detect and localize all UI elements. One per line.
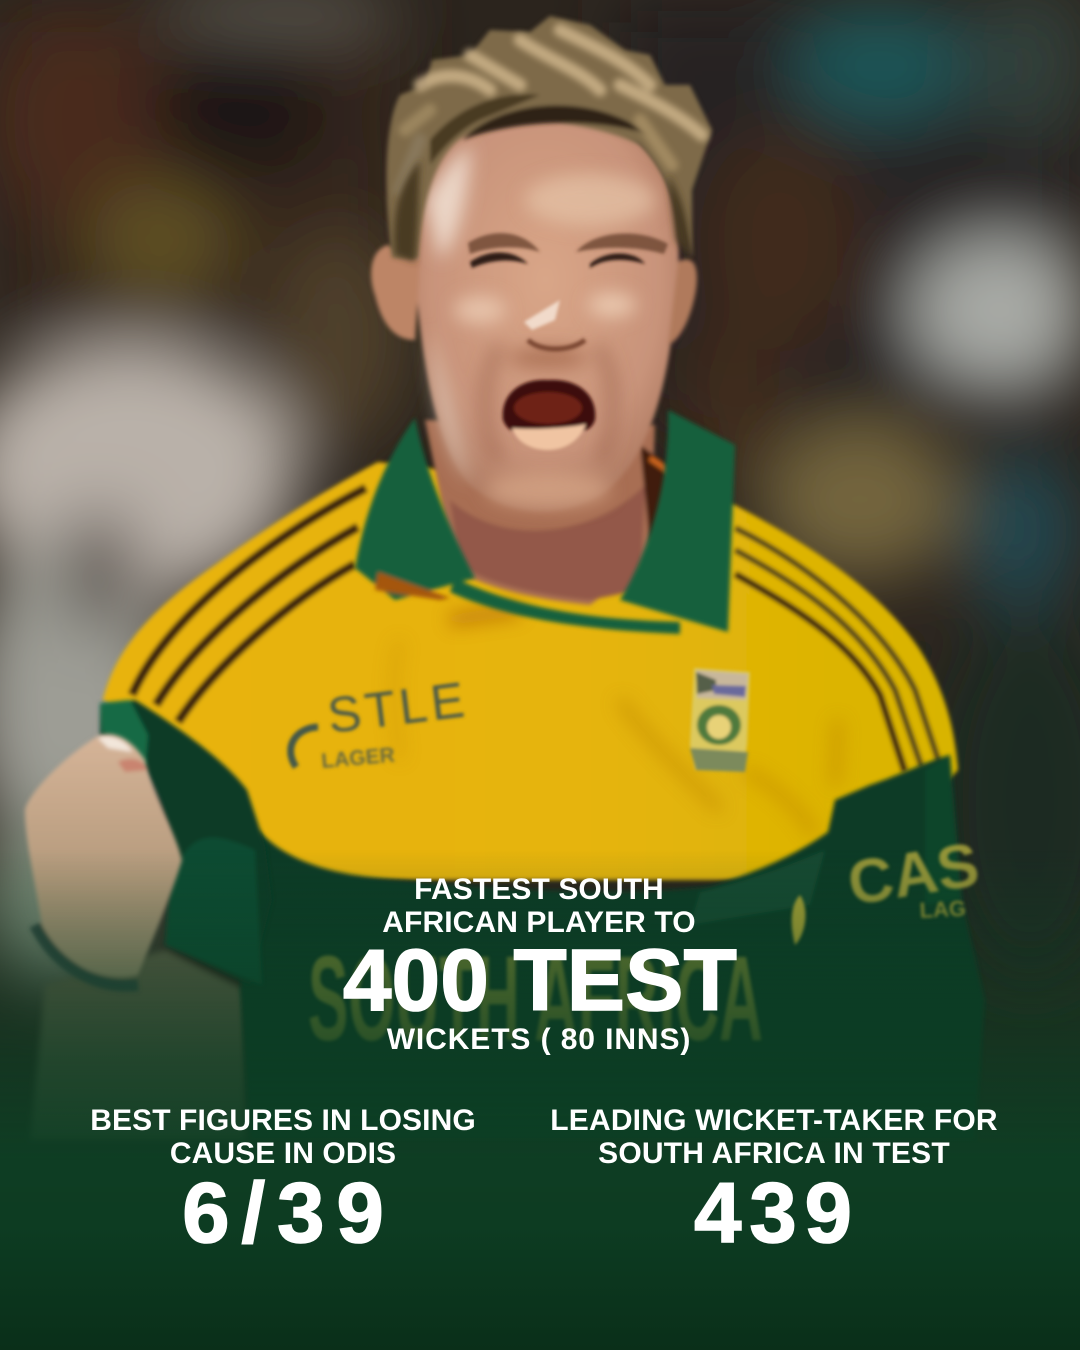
jersey body [103,462,958,880]
headline number: 400 TEST [343,932,737,1029]
stat label: BEST FIGURES IN LOSING [90,1104,476,1137]
badge and sponsor logo: LAGER [320,744,396,773]
left sleeve pulled by the fist [100,700,272,985]
headline label: FASTEST SOUTH [414,873,664,906]
collar [355,410,735,634]
badge and sponsor logo: STLE [325,671,471,744]
badge and sponsor logo [291,668,983,1067]
face shading and highlights [425,145,655,508]
headline sublabel: WICKETS ( 80 INNS) [387,1023,691,1056]
badge and sponsor logo: CAS [843,830,983,919]
shoulder stripes [132,488,366,695]
facial features [468,233,668,450]
bottom dark green gradient [0,850,1080,1350]
raised fist [25,734,182,986]
stat label: LEADING WICKET-TAKER FOR [550,1104,998,1137]
forearm below the fist [30,950,245,1140]
headline label: AFRICAN PLAYER TO [382,906,696,939]
hair [386,16,712,258]
stat left: best figures [90,1104,476,1261]
badge and sponsor logo: SOUTH AFRICA [308,931,763,1067]
badge and sponsor logo: LAG [919,896,967,923]
stat label: CAUSE IN ODIS [170,1137,396,1170]
stat value: 439 [694,1166,860,1261]
stat label: SOUTH AFRICA IN TEST [598,1137,950,1170]
stat value: 6/39 [182,1166,396,1261]
neck [425,420,690,605]
lower jersey in dark green [240,755,985,1140]
hair highlights [400,30,702,190]
stat label [90,1104,476,1170]
stat label [550,1104,998,1170]
stat right: leading wicket-taker [550,1104,998,1261]
head [371,112,697,511]
headline label [382,873,696,939]
side hair dark [394,160,690,262]
jersey fabric folds [394,610,838,835]
